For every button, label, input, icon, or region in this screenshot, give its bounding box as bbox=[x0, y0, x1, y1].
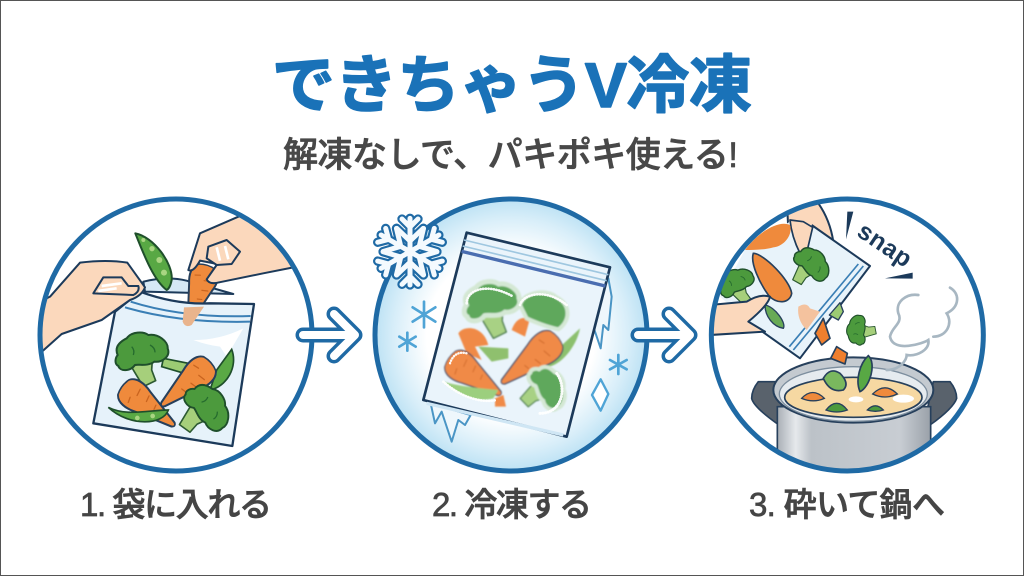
circle outline 3 bbox=[711, 199, 983, 471]
bag highlight bbox=[193, 328, 243, 357]
stem in bag bbox=[162, 358, 188, 374]
carrot held bbox=[187, 263, 218, 302]
carrot top bbox=[745, 224, 791, 250]
pod piece at bag mouth bbox=[829, 303, 843, 320]
pot body bbox=[777, 407, 931, 477]
frost speckles bbox=[443, 289, 567, 413]
frosted vegetables bbox=[440, 282, 580, 419]
broccoli bag bbox=[792, 247, 830, 286]
title: できちゃうV冷凍 bbox=[272, 51, 752, 121]
label: step 1: 1. 袋に入れる bbox=[80, 486, 272, 523]
soup ingredients bbox=[802, 388, 914, 412]
carrot seen through bag bbox=[183, 307, 204, 326]
upper hand thumb bbox=[790, 220, 813, 254]
soup bbox=[785, 377, 922, 417]
broccoli left bbox=[720, 268, 755, 302]
frozen bag body bbox=[423, 233, 610, 437]
pale carrot through bag bbox=[798, 305, 820, 330]
right hand bbox=[187, 216, 292, 284]
zipper bands bbox=[462, 240, 608, 286]
zipper bbox=[789, 264, 863, 350]
star crystals bbox=[399, 302, 627, 374]
icicles bottom bbox=[431, 403, 471, 442]
pod in bag bbox=[765, 305, 784, 328]
pot rim bbox=[773, 357, 933, 423]
diamond crystal bbox=[592, 379, 608, 411]
circle outline 1 bbox=[40, 199, 312, 471]
pod in bag bbox=[210, 349, 234, 390]
panel: step 3 into the pot bbox=[710, 197, 983, 477]
panel: step 2 frozen bag bbox=[374, 199, 647, 471]
pot handles bbox=[752, 382, 957, 425]
subtitle: 解凍なしで、パキポキ使える! bbox=[283, 136, 738, 175]
left hand bbox=[37, 261, 145, 353]
steam cloud bbox=[887, 288, 957, 370]
arrow 2 bbox=[638, 314, 690, 356]
lower hand bbox=[710, 296, 770, 335]
broccoli lower right bbox=[178, 384, 230, 434]
upper hand bbox=[786, 204, 834, 240]
falling broccoli bbox=[846, 314, 877, 346]
carrot bag bbox=[753, 253, 792, 302]
pea pod falling bbox=[135, 233, 172, 290]
snap ticks bbox=[846, 212, 913, 279]
label: step 2: 2. 冷凍する bbox=[432, 486, 592, 523]
zipper lines bbox=[125, 302, 251, 322]
bag front bbox=[93, 292, 254, 446]
falling carrot chunk bbox=[831, 347, 847, 364]
falling floret bbox=[823, 371, 846, 391]
snap text: snap bbox=[852, 218, 917, 273]
snowflake icon bbox=[374, 218, 446, 285]
frozen bag bbox=[720, 222, 870, 358]
panel: step 1 bag filling bbox=[37, 199, 323, 471]
falling pod bbox=[858, 356, 872, 392]
carrot right bbox=[160, 356, 217, 408]
circle outline 2 bbox=[375, 199, 647, 471]
bag back opening bbox=[143, 279, 233, 294]
carrot left bbox=[117, 378, 176, 428]
carrot dropping from bag bbox=[815, 318, 830, 345]
pod lower bbox=[108, 407, 168, 422]
bag outline bottom frost bbox=[427, 403, 563, 435]
label: step 3: 3. 砕いて鍋へ bbox=[749, 486, 945, 523]
icicles right bbox=[593, 278, 612, 348]
arrow 1 bbox=[303, 314, 355, 356]
broccoli top left bbox=[115, 333, 168, 387]
